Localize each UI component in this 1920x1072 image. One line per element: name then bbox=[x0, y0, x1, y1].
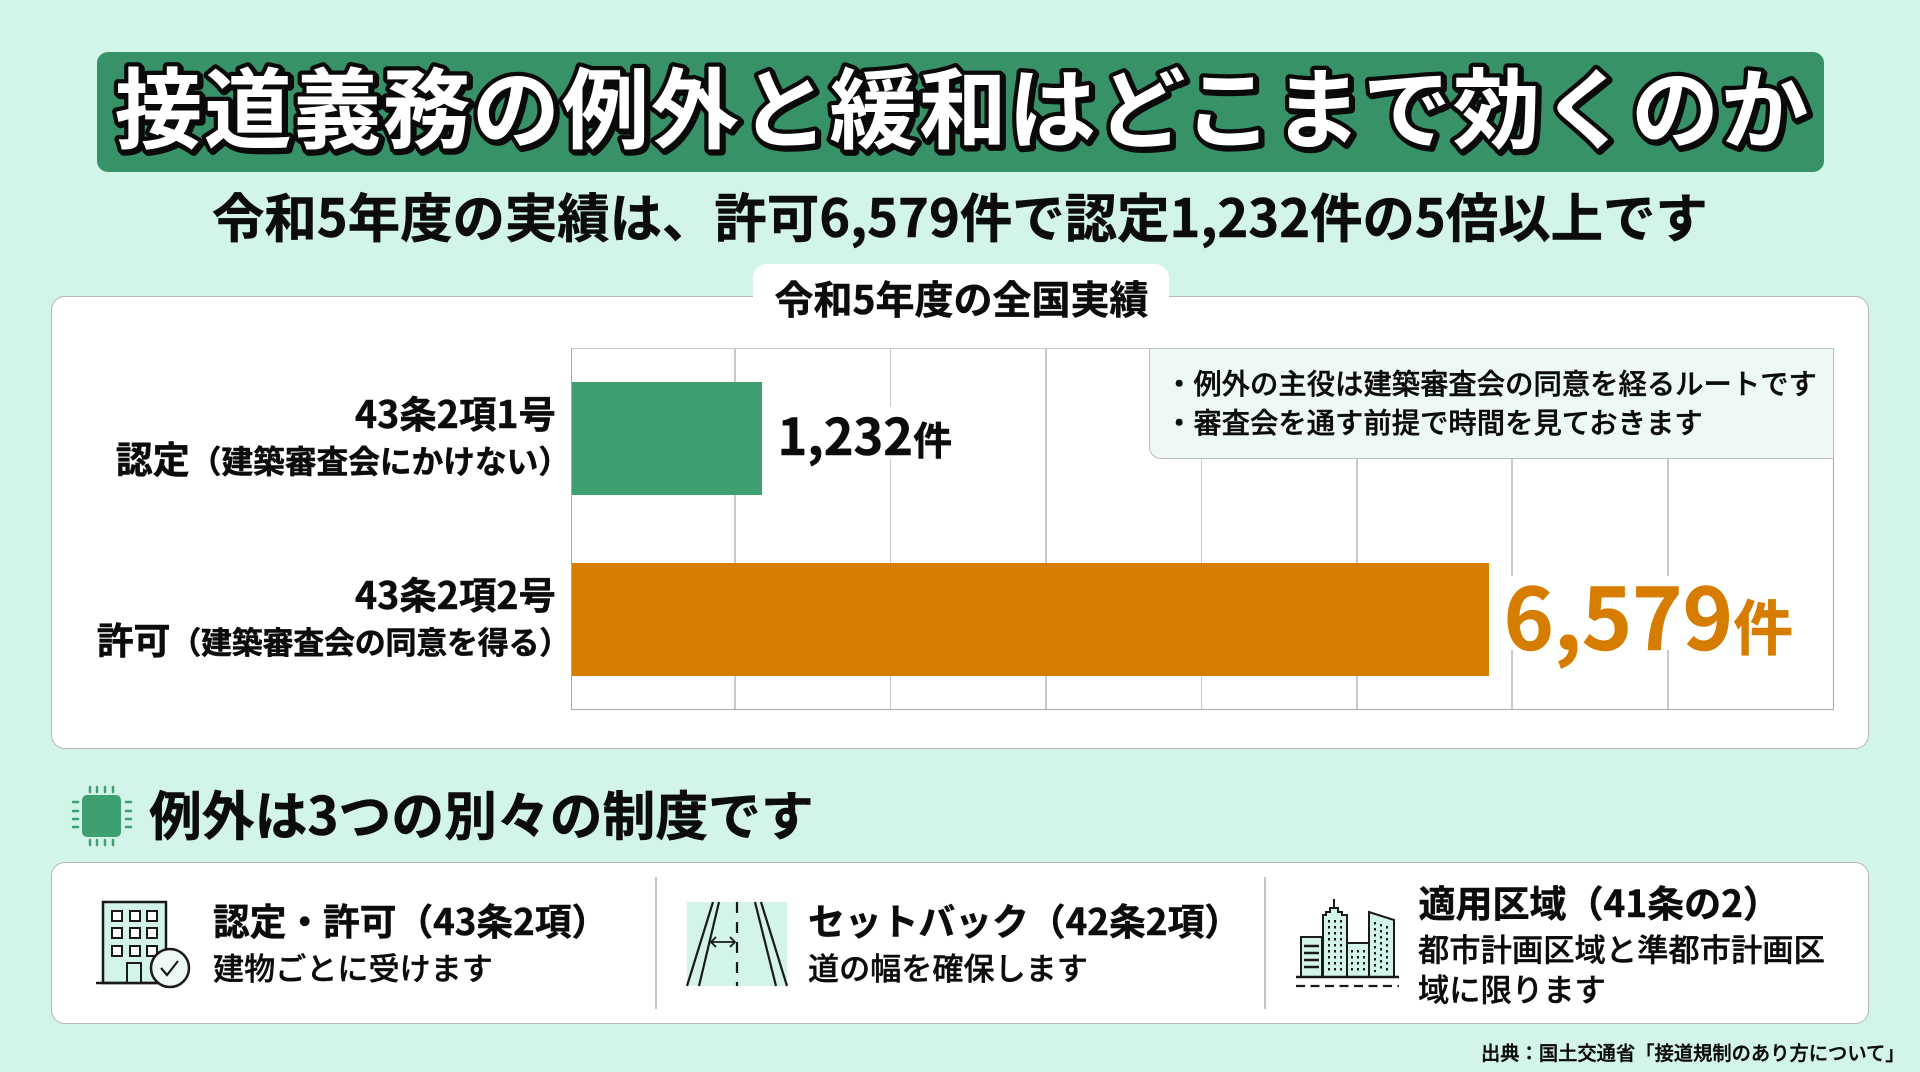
bar chart bbox=[97, 348, 1834, 710]
bar: 認定 1,232 bbox=[572, 382, 762, 495]
icon: chip bbox=[72, 786, 132, 846]
category label: 許可: 43条2項2号 bbox=[355, 564, 556, 620]
callout line 1: ・例外の主役は建築審査会の同意を経るルートです bbox=[1165, 362, 1817, 403]
icon: building with check bbox=[96, 900, 190, 988]
value: 6,579件: 6,579件 bbox=[1504, 551, 1793, 675]
bar: 許可 6,579 bbox=[572, 563, 1489, 676]
callout line 2: ・審査会を通す前提で時間を見ておきます bbox=[1165, 401, 1703, 442]
icon: city buildings bbox=[1296, 899, 1399, 988]
divider bbox=[1264, 877, 1266, 1009]
item: 適用区域 bbox=[1296, 874, 1825, 1011]
value: 1,232件 bbox=[778, 407, 954, 459]
panel tab heading bbox=[753, 264, 1169, 324]
icon: road setback bbox=[686, 902, 788, 986]
panel: three systems bbox=[51, 862, 1869, 1024]
tab heading text: 令和5年度の全国実績 bbox=[774, 270, 1149, 326]
item description: 都市計画区域と準都市計画区 bbox=[1418, 926, 1825, 971]
panel: national results chart bbox=[51, 296, 1869, 749]
item: 認定・許可 bbox=[96, 892, 608, 989]
item description: 建物ごとに受けます bbox=[213, 944, 493, 989]
value: 6,579件 bbox=[1504, 576, 1793, 650]
category label: 認定: 認定（建築審査会にかけない） bbox=[116, 430, 570, 484]
item title: 認定・許可（43条2項） bbox=[213, 892, 608, 946]
item title: セットバック（42条2項） bbox=[808, 892, 1241, 946]
category label: 認定: 43条2項1号 bbox=[355, 384, 556, 438]
item: セットバック bbox=[686, 892, 1241, 989]
title banner bbox=[96, 52, 1824, 172]
item title: 適用区域（41条の2） bbox=[1418, 874, 1780, 928]
divider bbox=[655, 877, 656, 1009]
plot frame bbox=[571, 348, 1834, 710]
panel background bbox=[51, 296, 1869, 749]
source note: 出典：国土交通省「接道規制のあり方について」 bbox=[1481, 1038, 1905, 1066]
value: 1,232件: 1,232件 bbox=[778, 396, 952, 470]
title text: 接道義務の例外と緩和はどこまで効くのか bbox=[114, 40, 1808, 168]
item description: 道の幅を確保します bbox=[808, 944, 1088, 989]
category label: 許可: 許可（建築審査会の同意を得る） bbox=[97, 610, 570, 664]
item: 適用区域: 域に限ります bbox=[1418, 966, 1606, 1011]
category label: 認定 bbox=[116, 384, 570, 484]
section heading: 例外は3つの別々の制度です bbox=[149, 774, 814, 850]
callout note bbox=[1149, 348, 1834, 459]
category label: 許可 bbox=[97, 564, 570, 664]
subtitle: 令和5年度の実績は、許可6,579件で認定1,232件の5倍以上です bbox=[212, 176, 1708, 252]
